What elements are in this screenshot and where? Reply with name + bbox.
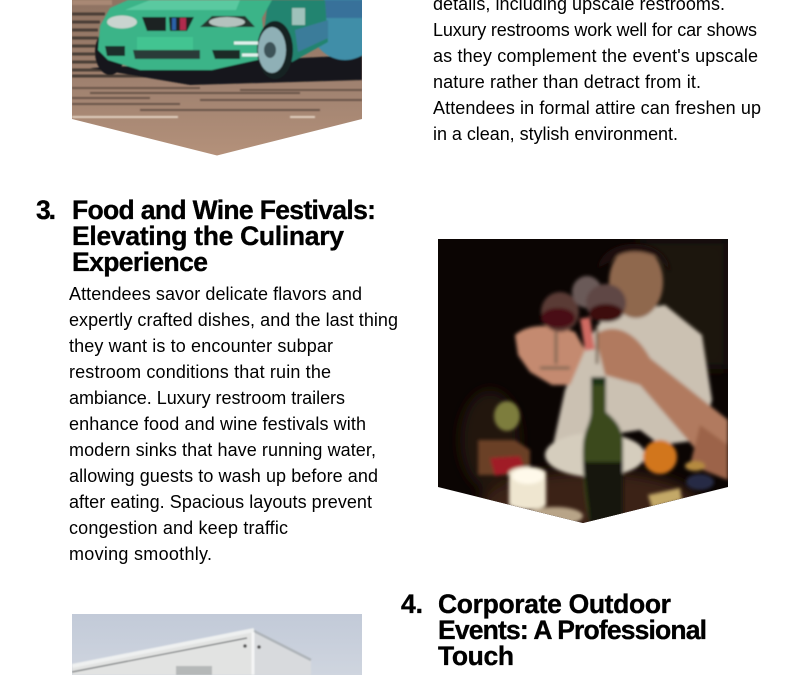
- step 3 heading: Elevating the Culinary: [72, 221, 344, 251]
- image: white restroom trailer: [72, 614, 362, 675]
- step 3 body text: after eating. Spacious layouts prevent: [69, 492, 372, 512]
- fruit and snacks: [643, 440, 677, 474]
- step 2 body text: [433, 0, 761, 144]
- step 2 body text: Luxury restrooms work well for car shows: [433, 20, 757, 40]
- step 3 heading: Experience: [72, 247, 208, 277]
- plate foreground: [527, 507, 583, 525]
- man: [552, 305, 712, 450]
- step 3 body text: enhance food and wine festivals with: [69, 414, 366, 434]
- candle: [509, 467, 546, 510]
- step 3 body text: Attendees savor delicate flavors and: [69, 284, 362, 304]
- step 2 body text: nature rather than detract from it.: [433, 72, 701, 92]
- step 2 body text: as they complement the event's upscale: [433, 46, 758, 66]
- step 4 heading: Touch: [438, 641, 514, 671]
- step 3 heading: [72, 195, 376, 277]
- step 3 body text: moving smoothly.: [69, 544, 212, 564]
- step 4 heading: Events: A Professional: [438, 615, 707, 645]
- step 3 body text: [69, 284, 398, 564]
- hands and arms: [515, 326, 585, 385]
- image: wine glasses toast at dinner: [438, 239, 728, 540]
- step 3 number: 3.: [36, 195, 56, 225]
- step 4 heading: Corporate Outdoor: [438, 589, 671, 619]
- step 3 body text: congestion and keep traffic: [69, 518, 288, 538]
- step 2 body text: Attendees in formal attire can freshen up: [433, 98, 761, 118]
- step 4 heading: [438, 589, 707, 671]
- step 3 body text: modern sinks that have running water,: [69, 440, 376, 460]
- step 3 body text: expertly crafted dishes, and the last thing: [69, 310, 398, 330]
- step 4 number: 4.: [401, 589, 423, 619]
- wine bottle: [583, 377, 623, 523]
- step 3 body text: they want is to encounter subpar: [69, 336, 333, 356]
- step 3 body text: restroom conditions that ruin the: [69, 362, 331, 382]
- step 3 heading: Food and Wine Festivals:: [72, 195, 376, 225]
- step 2 body text: in a clean, stylish environment.: [433, 124, 678, 144]
- plate: [545, 433, 645, 477]
- image: drifting green car: [72, 0, 379, 156]
- glasses: [541, 292, 579, 332]
- step 3 body text: allowing guests to wash up before and: [69, 466, 378, 486]
- step 3 body text: ambiance. Luxury restroom trailers: [69, 388, 345, 408]
